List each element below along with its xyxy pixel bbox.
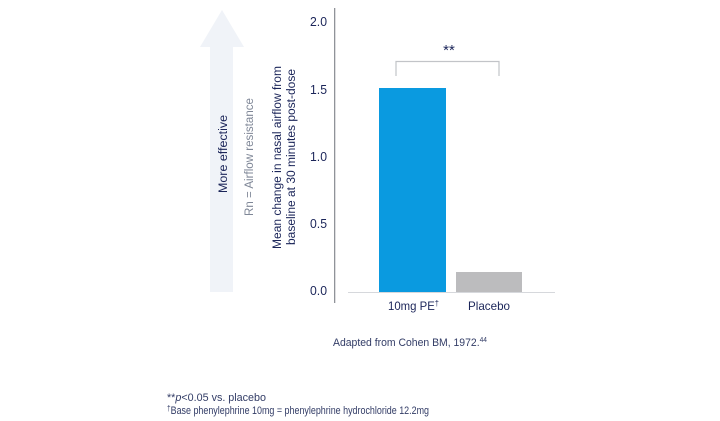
y-axis tick labels: 0.0: [310, 284, 327, 298]
y-axis line: [334, 8, 335, 303]
y-axis tick labels: 1.5: [310, 83, 327, 97]
significance stars: **: [443, 42, 455, 59]
arrow: more effective: [200, 10, 244, 292]
label: 10mg PE: †: [435, 299, 439, 308]
bar: placebo: [456, 272, 522, 292]
y-axis title: Mean change in nasal airflow from: [272, 66, 284, 249]
label: placebo: Placebo: [468, 299, 510, 313]
footnotes: Base phenylephrine 10mg = phenylephrine hydrochloride 12.2mg: [171, 405, 429, 417]
source citation: Adapted from Cohen BM, 1972.: [333, 337, 488, 349]
footnotes: †: [167, 404, 171, 413]
label: 10mg PE: 10mg PE: [388, 299, 437, 313]
y-axis tick labels: 0.5: [310, 217, 327, 231]
y-axis tick labels: 2.0: [310, 15, 327, 29]
footnotes: [167, 392, 429, 417]
significance bracket: [396, 62, 499, 76]
y-axis tick labels: 1.0: [310, 150, 327, 164]
arrow label: More effective: [218, 115, 230, 193]
y-axis title: baseline at 30 minutes post-dose: [286, 69, 298, 245]
y-axis tick labels: [310, 15, 327, 298]
y-axis title: [272, 66, 298, 249]
source citation: 44: [480, 337, 487, 344]
note: airflow resistance: Rn = Airflow resistance: [244, 98, 256, 216]
footnotes: **p<0.05 vs. placebo: [167, 392, 266, 404]
x-axis line: [348, 292, 555, 293]
bar: 10mg PE: [379, 88, 446, 292]
